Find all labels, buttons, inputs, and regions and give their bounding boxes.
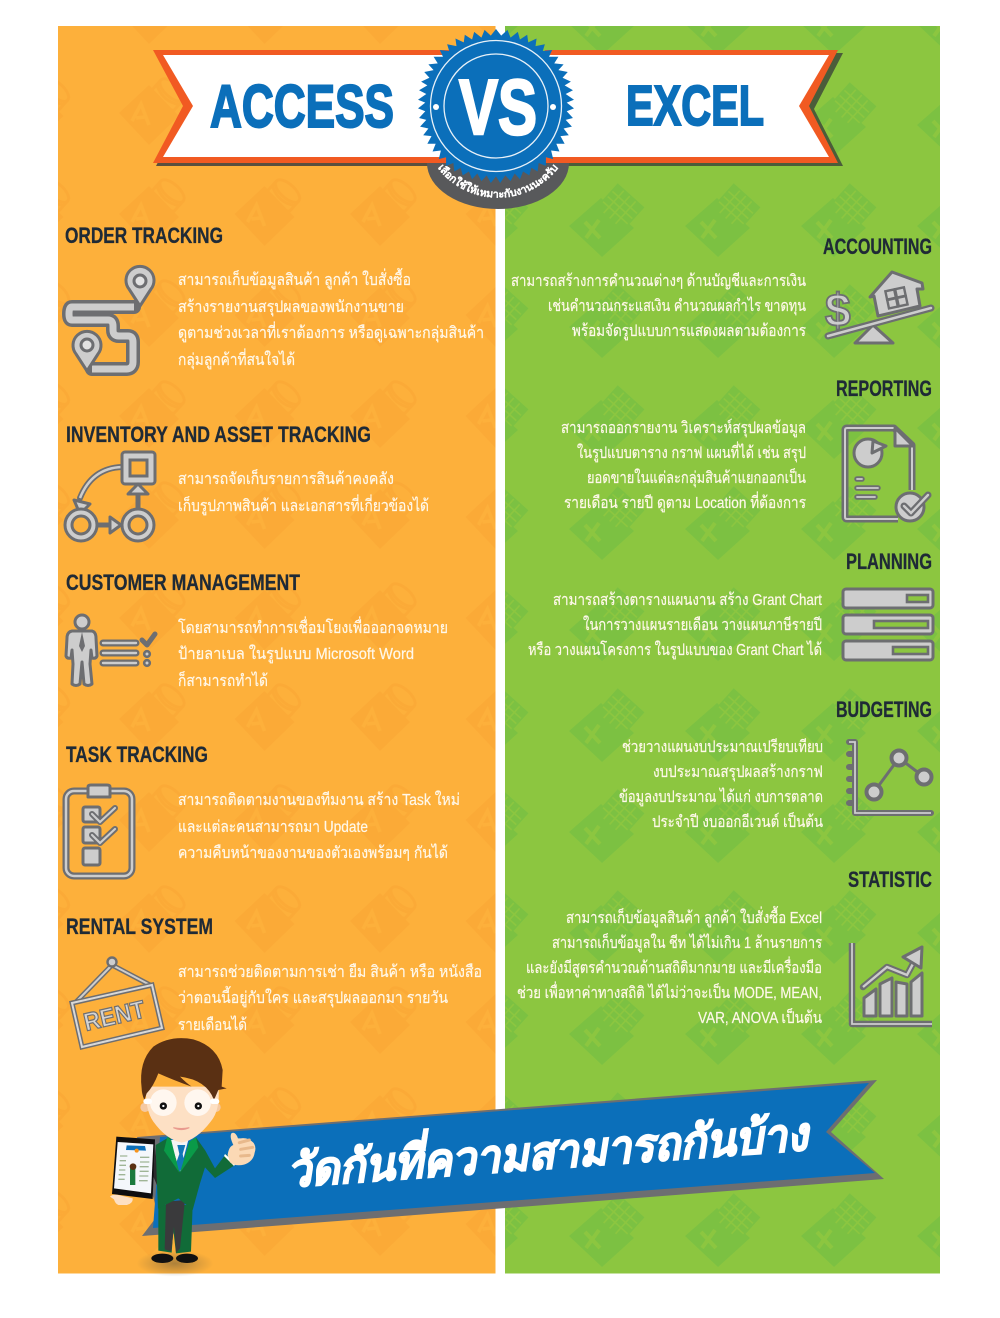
icon: rent sign	[72, 958, 162, 1047]
text block: planning	[528, 591, 822, 660]
text block: customer management: โดยสามารถทำการเชื่อมโยงเพื่อออกจดหมาย	[178, 616, 448, 637]
heading: order tracking: ORDER TRACKING	[65, 223, 223, 248]
text block: rental system: ว่าตอนนี้อยู่กับใคร และสรุปผลออกมา รายวัน	[178, 986, 448, 1008]
text block: customer management: ป้ายลาเบล ในรูปแบบ Microsoft Word	[178, 644, 414, 664]
icon: route with map pins	[69, 266, 154, 371]
heading: inventory and asset tracking: INVENTORY AND ASSET TRACKING	[66, 422, 371, 447]
banner heading: วัดกันที่ความสามารถกันบ้าง	[284, 1101, 813, 1197]
text block: budgeting: ข้อมูลงบประมาณ ได้แก่ งบการตลาด	[619, 787, 823, 807]
jacket	[153, 1137, 236, 1210]
icon: line chart	[849, 742, 932, 813]
seal caption arc: เลือกใช้ให้เหมาะกับงานนะครับ	[438, 164, 558, 198]
ground shadow	[137, 1250, 213, 1277]
heading: excel: EXCEL	[626, 74, 764, 138]
text block: budgeting: ช่วยวางแผนงบประมาณเปรียบเทียบ	[622, 738, 823, 756]
text block: task tracking	[178, 790, 460, 862]
text block: statistic: ช่วย เพื่อหาค่าทางสถิติ ได้ไม่ว่าจะเป็น MODE, MEAN,	[517, 981, 822, 1002]
text block: rental system	[178, 963, 482, 1034]
heading: reporting: REPORTING	[836, 376, 932, 401]
legs and shoes	[151, 1200, 198, 1263]
section: statistic	[517, 867, 932, 1027]
icon: inventory cycle	[65, 452, 155, 541]
right ribbon	[545, 50, 843, 166]
section: rental system	[66, 914, 482, 1047]
text block: customer management: ก็สามารถทำได้	[178, 670, 268, 690]
section: budgeting	[619, 697, 932, 831]
text block: budgeting	[619, 738, 823, 831]
icon: money and house on scale: $	[825, 284, 851, 336]
text block: budgeting: ประจำปี งบออกอีเวนต์ เป็นต้น	[652, 811, 823, 831]
icon: clipboard checklist	[66, 785, 132, 876]
text block: order tracking	[178, 268, 484, 370]
text block: rental system: รายเดือนได้	[178, 1015, 247, 1034]
panel: excel column	[505, 26, 940, 1274]
heading: budgeting: BUDGETING	[836, 697, 932, 722]
left ribbon	[153, 50, 450, 166]
text block: inventory: สามารถจัดเก็บรายการสินค้าคงคลัง	[178, 468, 394, 488]
text block: task tracking: ความคืบหน้าของงานของตัวเองพร้อมๆ กันได้	[178, 843, 448, 862]
icon: rent sign: RENT	[81, 996, 148, 1037]
vs lettering: VS	[459, 63, 537, 151]
icon: gantt bars	[843, 589, 933, 660]
icon: money and house on scale	[825, 272, 931, 343]
tablet	[110, 1137, 155, 1205]
section: accounting	[511, 234, 932, 343]
text block: order tracking: สามารถเก็บข้อมูลสินค้า ลูกค้า ใบสั่งซื้อ	[178, 268, 411, 290]
section: inventory and asset tracking	[65, 422, 429, 541]
icon: person with checklist	[66, 615, 155, 686]
text block: accounting: เช่นคำนวณกระแสเงิน คำนวณผลกำไร ขาดทุน	[548, 296, 806, 316]
heading: statistic: STATISTIC	[848, 867, 932, 892]
text block: statistic: VAR, ANOVA เป็นต้น	[698, 1007, 822, 1027]
heading: accounting: ACCOUNTING	[823, 234, 932, 259]
text block: reporting: สามารถออกรายงาน วิเคราะห์สรุปผลข้อมูล	[561, 418, 806, 438]
text block: statistic: และยังมีสูตรคำนวณด้านสถิติมากมาย และมีเครื่องมือ	[526, 956, 822, 978]
text block: inventory	[178, 468, 429, 516]
heading: customer management: CUSTOMER MANAGEMENT	[66, 570, 300, 595]
thumbs up hand	[228, 1133, 255, 1165]
heading: task tracking: TASK TRACKING	[66, 742, 208, 767]
text block: task tracking: สามารถติดตามงานของทีมงาน สร้าง Task ใหม่	[178, 790, 460, 809]
panel: access column	[58, 26, 496, 1274]
text block: planning: ในการวางแผนรายเดือน วางแผนภาษีรายปี	[583, 615, 822, 634]
heading: planning: PLANNING	[846, 549, 932, 574]
text block: reporting: ยอดขายในแต่ละกลุ่มสินค้าแยกออกเป็น	[587, 467, 806, 488]
section: order tracking	[65, 223, 484, 371]
vs seal	[418, 29, 574, 183]
text block: customer management	[178, 616, 448, 690]
text block: statistic	[517, 906, 822, 1027]
text block: planning: หรือ วางแผนโครงการ ในรูปแบบของ Grant Chart ได้	[528, 640, 822, 660]
heading: rental system: RENTAL SYSTEM	[66, 914, 213, 939]
section: reporting	[561, 376, 932, 521]
section: task tracking	[66, 742, 460, 876]
holding hand	[110, 1195, 133, 1205]
bottom ribbon banner	[137, 1080, 884, 1236]
text block: task tracking: และแต่ละคนสามารถมา Update	[178, 819, 368, 836]
heading: access: ACCESS	[210, 73, 394, 140]
text block: inventory: เก็บรูปภาพสินค้า และเอกสารที่เกี่ยวข้องได้	[178, 494, 429, 516]
section: customer management	[66, 570, 448, 690]
text block: accounting	[511, 272, 806, 341]
head	[140, 1038, 227, 1143]
text block: accounting: สามารถสร้างการคำนวณต่างๆ ด้านบัญชีและการเงิน	[511, 272, 806, 290]
character: man with tablet and thumbs up	[110, 1038, 255, 1277]
text block: order tracking: สร้างรายงานสรุปผลของพนักงานขาย	[178, 298, 404, 317]
text block: reporting: ในรูปแบบตาราง กราฟ แผนที่ได้ เช่น สรุป	[577, 441, 806, 463]
icon: report document	[845, 428, 928, 521]
icon: bar chart with rising arrow	[852, 943, 932, 1024]
text block: statistic: สามารถเก็บข้อมูลสินค้า ลูกค้า ใบสั่งซื้อ Excel	[566, 906, 822, 928]
text block: statistic: สามารถเก็บข้อมูลใน ชีท ได้ไม่เกิน 1 ล้านรายการ	[552, 932, 822, 953]
text block: planning: สามารถสร้างตารางแผนงาน สร้าง Grant Chart	[553, 591, 822, 609]
text block: rental system: สามารถช่วยติดตามการเช่า ยืม สินค้า หรือ หนังสือ	[178, 963, 482, 981]
section: planning	[528, 549, 933, 660]
text block: budgeting: งบประมาณสรุปผลสร้างกราฟ	[653, 763, 823, 782]
text block: reporting: รายเดือน รายปี ดูตาม Location ที่ต้องการ	[564, 491, 806, 513]
text block: accounting: พร้อมจัดรูปแบบการแสดงผลตามต้องการ	[572, 322, 806, 341]
text block: order tracking: ดูตามช่วงเวลาที่เราต้องการ หรือดูเฉพาะกลุ่มสินค้า	[178, 321, 484, 343]
text block: order tracking: กลุ่มลูกค้าที่สนใจได้	[178, 348, 295, 370]
text block: reporting	[561, 418, 806, 513]
title banner: access vs excel	[153, 29, 843, 209]
